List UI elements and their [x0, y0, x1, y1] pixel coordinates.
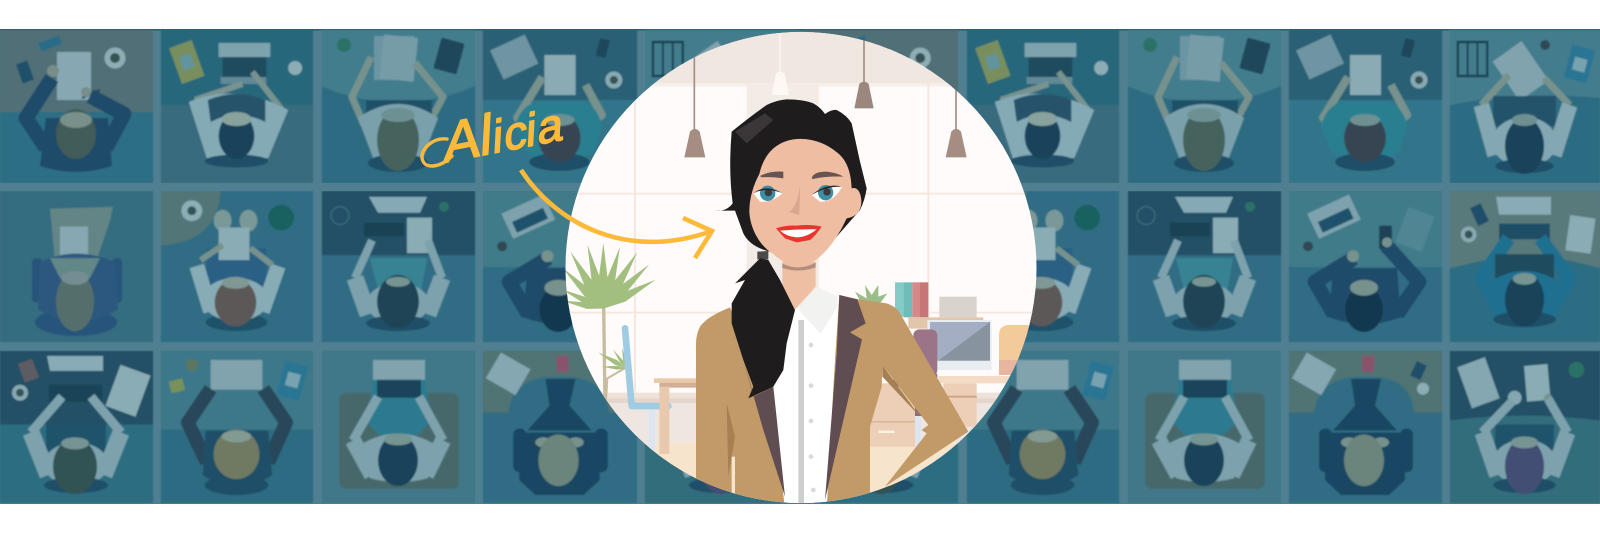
mouth	[776, 225, 822, 242]
ponytail	[732, 258, 795, 398]
eyes	[753, 185, 842, 202]
jacket shadows	[727, 365, 920, 477]
label: Alicia	[422, 89, 565, 176]
hair tie	[757, 251, 768, 259]
office wall and windows	[570, 32, 1032, 393]
collar	[798, 287, 837, 334]
hair shine	[735, 113, 773, 143]
arrow pointing to Alicia	[521, 170, 712, 258]
tile row 2	[0, 191, 1600, 342]
palm plants	[566, 243, 656, 401]
label: Alicia: i	[492, 109, 504, 164]
shirt	[772, 297, 838, 510]
lapels	[743, 295, 866, 500]
blazer	[696, 295, 968, 510]
pendant lamps	[684, 33, 967, 157]
eyebrows	[760, 172, 843, 179]
shirt buttons	[809, 343, 816, 492]
neck	[782, 262, 816, 309]
label: Alicia: i	[525, 102, 538, 157]
blue chair and left table	[625, 328, 697, 454]
portrait circle: Alicia in office	[550, 20, 1050, 510]
tile row 1	[0, 0, 1600, 183]
label: Alicia: A	[442, 105, 482, 176]
right desk, binders and monitor	[855, 282, 1040, 447]
face	[749, 139, 861, 265]
woman: Alicia	[696, 99, 968, 510]
back hair	[715, 99, 867, 253]
label: Alicia: a	[537, 97, 565, 155]
tile row 3	[0, 351, 1600, 503]
label: Alicia: l	[479, 103, 494, 169]
gap between arm and body	[732, 457, 735, 497]
label: Alicia: c	[503, 104, 529, 161]
floor	[602, 392, 1000, 503]
nose	[788, 187, 800, 215]
